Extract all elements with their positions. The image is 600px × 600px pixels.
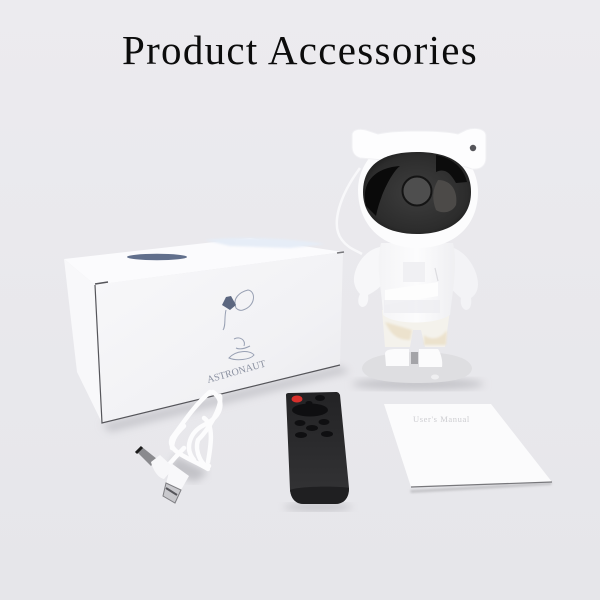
remote body (286, 392, 349, 504)
box top (64, 238, 343, 285)
cable loop (337, 168, 362, 254)
lens (402, 176, 432, 206)
shadow under base (352, 378, 484, 390)
red power button (292, 396, 302, 402)
remote control (284, 392, 352, 511)
title: Product Accessories (122, 27, 478, 73)
visor (363, 152, 471, 234)
USB cable (136, 392, 220, 503)
remote shadow (284, 503, 352, 511)
legs (382, 310, 450, 347)
visor reflections (365, 166, 400, 216)
base (362, 352, 472, 383)
cable shadow (168, 455, 208, 482)
manual title: User's Manual (413, 414, 470, 424)
top logo (127, 254, 187, 260)
box brand name: ASTRONAUT (206, 359, 267, 386)
torso (379, 243, 455, 322)
astronaut projector (337, 128, 486, 390)
user manual (384, 404, 552, 493)
left arm (354, 247, 384, 307)
barrel plug (137, 447, 157, 466)
chest pack (403, 262, 425, 282)
USB connector (166, 463, 189, 490)
box front (95, 252, 343, 423)
product box (64, 238, 350, 432)
helmet ear band (352, 128, 486, 169)
cable coils (160, 392, 220, 474)
right arm (446, 247, 478, 310)
helmet (358, 135, 478, 248)
sensor (470, 145, 476, 151)
box shadow (102, 366, 350, 432)
feet (385, 349, 409, 366)
buttons (292, 395, 333, 438)
box illustration (222, 290, 254, 360)
box left side (64, 259, 102, 423)
